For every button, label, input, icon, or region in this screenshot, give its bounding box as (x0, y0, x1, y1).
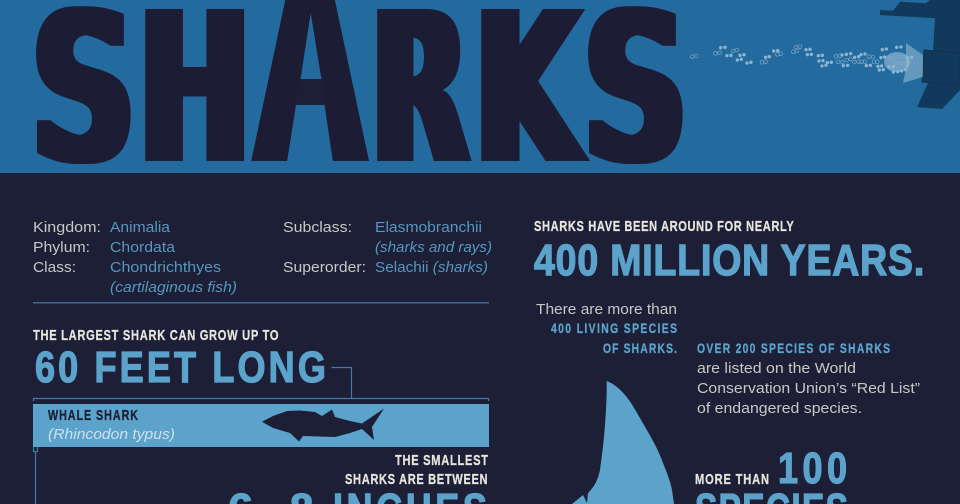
panel: taxonomy: Class: (33, 260, 76, 276)
text: red list: Conservation Union’s “Red List” (697, 381, 920, 397)
header band (0, 0, 960, 173)
heading: more than: MORE THAN (695, 471, 770, 488)
text: red list (697, 361, 920, 417)
stat: 6 to 8 inches (228, 488, 490, 504)
panel: taxonomy: (sharks and rays) (375, 240, 492, 256)
heading: sharks are between: SHARKS ARE BETWEEN (345, 471, 488, 488)
heading: largest shark: THE LARGEST SHARK CAN GROW UP TO (33, 327, 279, 344)
panel: taxonomy: (cartilaginous fish) (110, 280, 237, 296)
panel: taxonomy: Kingdom: (33, 220, 101, 236)
icon: submarine (880, 0, 960, 109)
stat: 400 million years: 400 MILLION YEARS. (534, 236, 925, 284)
text: red list: of endangered species. (697, 401, 862, 417)
bracket connector (34, 368, 488, 401)
stat: 60 feet long: 60 FEET LONG (35, 343, 329, 392)
panel: taxonomy: Chondrichthyes (110, 260, 221, 276)
panel: taxonomy: Selachii (sharks) (375, 260, 488, 276)
panel: taxonomy: Phylum: (33, 240, 90, 256)
panel: taxonomy: Superorder: (283, 260, 366, 276)
panel: taxonomy: Animalia (110, 220, 171, 236)
heading: the smallest: THE SMALLEST (395, 452, 489, 469)
stat: 100: 100 (778, 444, 851, 493)
heading: around for nearly: SHARKS HAVE BEEN AROUND FOR NEARLY (534, 218, 794, 235)
icon: shark fin (572, 381, 674, 504)
panel: taxonomy: Chordata (110, 240, 176, 256)
heading: 400 living species: 400 LIVING SPECIES (551, 320, 678, 336)
heading: of sharks: OF SHARKS. (603, 340, 678, 356)
panel: taxonomy: Subclass: (283, 220, 352, 236)
title (32, 0, 686, 219)
connector: smallest shark (34, 447, 38, 504)
text: more than 400: There are more than (536, 302, 677, 318)
text: red list: are listed on the World (697, 361, 856, 377)
icon: whale shark silhouette (262, 408, 384, 442)
panel: taxonomy: Elasmobranchii (375, 220, 482, 236)
label: whale shark: WHALE SHARK (48, 408, 139, 424)
retouch of the title letter A: crossbar, counter and leg opening (287, 13, 333, 162)
bubbles (690, 45, 913, 74)
bar: whale shark (33, 404, 489, 447)
heading: over 200 species: OVER 200 SPECIES OF SHARKS (697, 340, 891, 356)
label: species name: (Rhincodon typus) (48, 427, 175, 443)
panel: taxonomy (33, 220, 492, 304)
